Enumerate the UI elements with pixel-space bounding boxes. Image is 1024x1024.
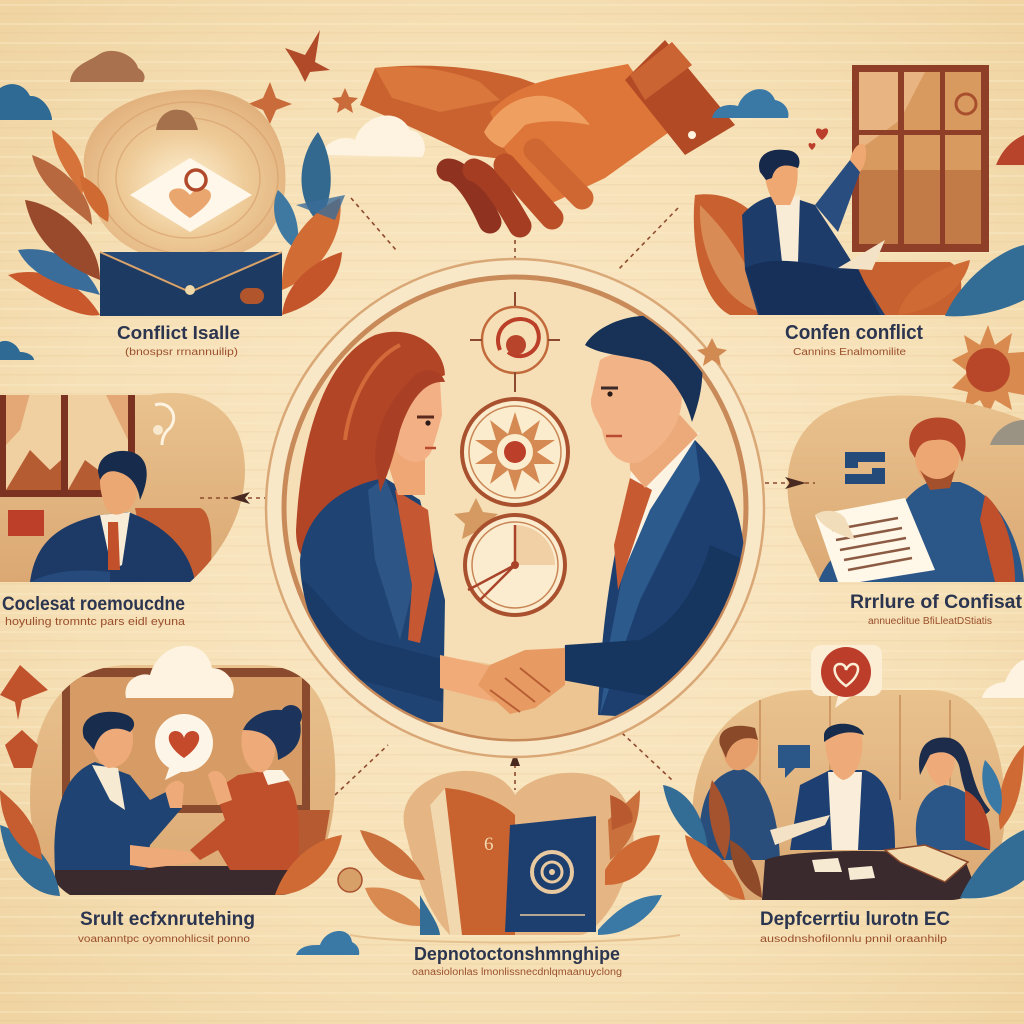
left arm xyxy=(360,66,610,170)
caption: middle left: hoyuling tromntc pars eidl eyuna xyxy=(5,616,186,628)
leaves xyxy=(0,825,60,896)
caption: middle right: annueclitue BfiLleatDStiatis xyxy=(868,616,992,627)
icon: clock xyxy=(465,515,565,615)
glow rings xyxy=(98,102,278,254)
heading: Confen conflict: Confen conflict xyxy=(785,322,923,344)
fingers xyxy=(448,150,582,226)
sleeve xyxy=(302,580,445,702)
centre person xyxy=(790,724,895,850)
hair xyxy=(585,316,702,422)
panel: middle left man at desk xyxy=(0,385,245,582)
ornament: bottom left seed xyxy=(338,868,362,892)
woman xyxy=(296,332,515,722)
sleeve xyxy=(562,545,745,700)
right leaves xyxy=(960,745,1024,898)
panel: top left conflict envelope xyxy=(8,90,345,316)
document xyxy=(815,498,935,582)
neck & face xyxy=(389,449,425,495)
left leaves xyxy=(8,130,109,316)
open book xyxy=(885,845,968,882)
caption: top left: (bnospsr rrnannuilip) xyxy=(125,347,238,358)
cloud: top left blue xyxy=(0,84,52,120)
window xyxy=(0,385,135,497)
caption: bottom left: voananntpc oyomnohlicsit ponno xyxy=(78,934,251,945)
left person xyxy=(698,726,780,860)
hand xyxy=(478,648,565,714)
cloud and heart: far right xyxy=(996,135,1024,165)
speech icon xyxy=(8,510,44,536)
shirt xyxy=(395,490,435,643)
arrowheads xyxy=(230,268,806,766)
open orange book: 6 xyxy=(484,834,494,855)
cloud xyxy=(125,646,234,698)
cloud: bottom blue xyxy=(296,931,359,955)
chair xyxy=(298,810,330,858)
navy book xyxy=(505,816,596,932)
neck and face xyxy=(628,415,698,488)
table xyxy=(55,866,290,895)
person xyxy=(818,417,1024,582)
icon: sun right xyxy=(952,325,1024,415)
cloud: top centre xyxy=(322,116,425,157)
heading: Coclesat roemoucdne: Coclesat roemoucdne xyxy=(2,594,185,615)
panel: bottom right group meeting xyxy=(663,645,1024,900)
heading: Conflict Isalle: Conflict Isalle xyxy=(117,323,240,343)
right leaves xyxy=(598,790,662,935)
left leaves xyxy=(360,830,440,935)
tie xyxy=(614,478,652,590)
man xyxy=(478,316,745,720)
right leaves xyxy=(274,132,345,315)
window xyxy=(852,65,989,252)
cloud right xyxy=(990,420,1024,445)
caption: top right: Cannins Enalmomilite xyxy=(793,347,907,358)
connector arrows xyxy=(200,198,815,795)
cuff xyxy=(625,40,735,155)
icon: spiral xyxy=(470,292,560,392)
man xyxy=(30,451,195,582)
speech bubble heart xyxy=(155,714,213,780)
panel: bottom left couple talking xyxy=(0,646,342,898)
chair xyxy=(135,508,211,582)
speech bubble heart xyxy=(811,645,882,708)
leaves xyxy=(898,260,970,315)
man xyxy=(54,712,200,870)
table xyxy=(762,851,980,900)
heading: Depnotoctonshmnghipe: Depnotoctonshmnghipe xyxy=(414,944,620,964)
hearts xyxy=(809,128,828,150)
central circle xyxy=(266,259,764,760)
cloud right xyxy=(982,660,1024,698)
heading: Depfcerrtiu lurotn EC: Depfcerrtiu lurotn EC xyxy=(760,909,950,930)
jacket xyxy=(300,478,445,722)
blob xyxy=(404,771,634,935)
glow blob xyxy=(84,90,285,262)
cloud: top right blue xyxy=(712,89,788,118)
left leaves xyxy=(663,780,762,900)
vertical panel lines xyxy=(760,695,950,860)
panel: middle right man with document xyxy=(788,396,1024,582)
cloud: middle left blue xyxy=(0,341,34,360)
right person xyxy=(916,737,990,850)
heart diamond xyxy=(130,158,252,232)
sofa xyxy=(694,194,800,315)
heading: Rrrlure of Confisat: Rrrlure of Confisat xyxy=(850,592,1023,613)
man xyxy=(742,144,885,315)
bird decoration xyxy=(285,30,330,82)
hair back xyxy=(296,332,445,570)
cloud: top left brown xyxy=(70,51,145,82)
heading: Srult ecfxnrutehing: Srult ecfxnrutehing xyxy=(80,909,255,930)
open orange book xyxy=(430,788,515,935)
star top right xyxy=(697,338,727,366)
document pass xyxy=(770,815,830,845)
icon: blue S xyxy=(845,452,885,484)
star decorations xyxy=(248,82,358,124)
shirt xyxy=(626,432,700,567)
star xyxy=(454,498,498,539)
cloud on glow xyxy=(156,110,198,130)
flower branch xyxy=(0,665,48,768)
woman xyxy=(190,705,302,870)
icon: sun dial xyxy=(462,399,568,505)
handshake illustration xyxy=(360,40,735,226)
envelope xyxy=(100,252,282,316)
small bubble xyxy=(778,745,810,778)
caption: bottom centre: oanasiolonlas lmonlissnecdnlqmaanuyclong xyxy=(412,967,622,978)
board xyxy=(62,668,310,813)
panel: top right man by window xyxy=(694,65,1024,316)
jacket xyxy=(598,440,745,720)
panel: bottom centre books xyxy=(350,771,680,942)
right hand and forearm xyxy=(490,64,672,205)
caption: bottom right: ausodnshofilonnlu pnnil oraanhilp xyxy=(760,934,948,945)
lower glow xyxy=(346,660,672,739)
